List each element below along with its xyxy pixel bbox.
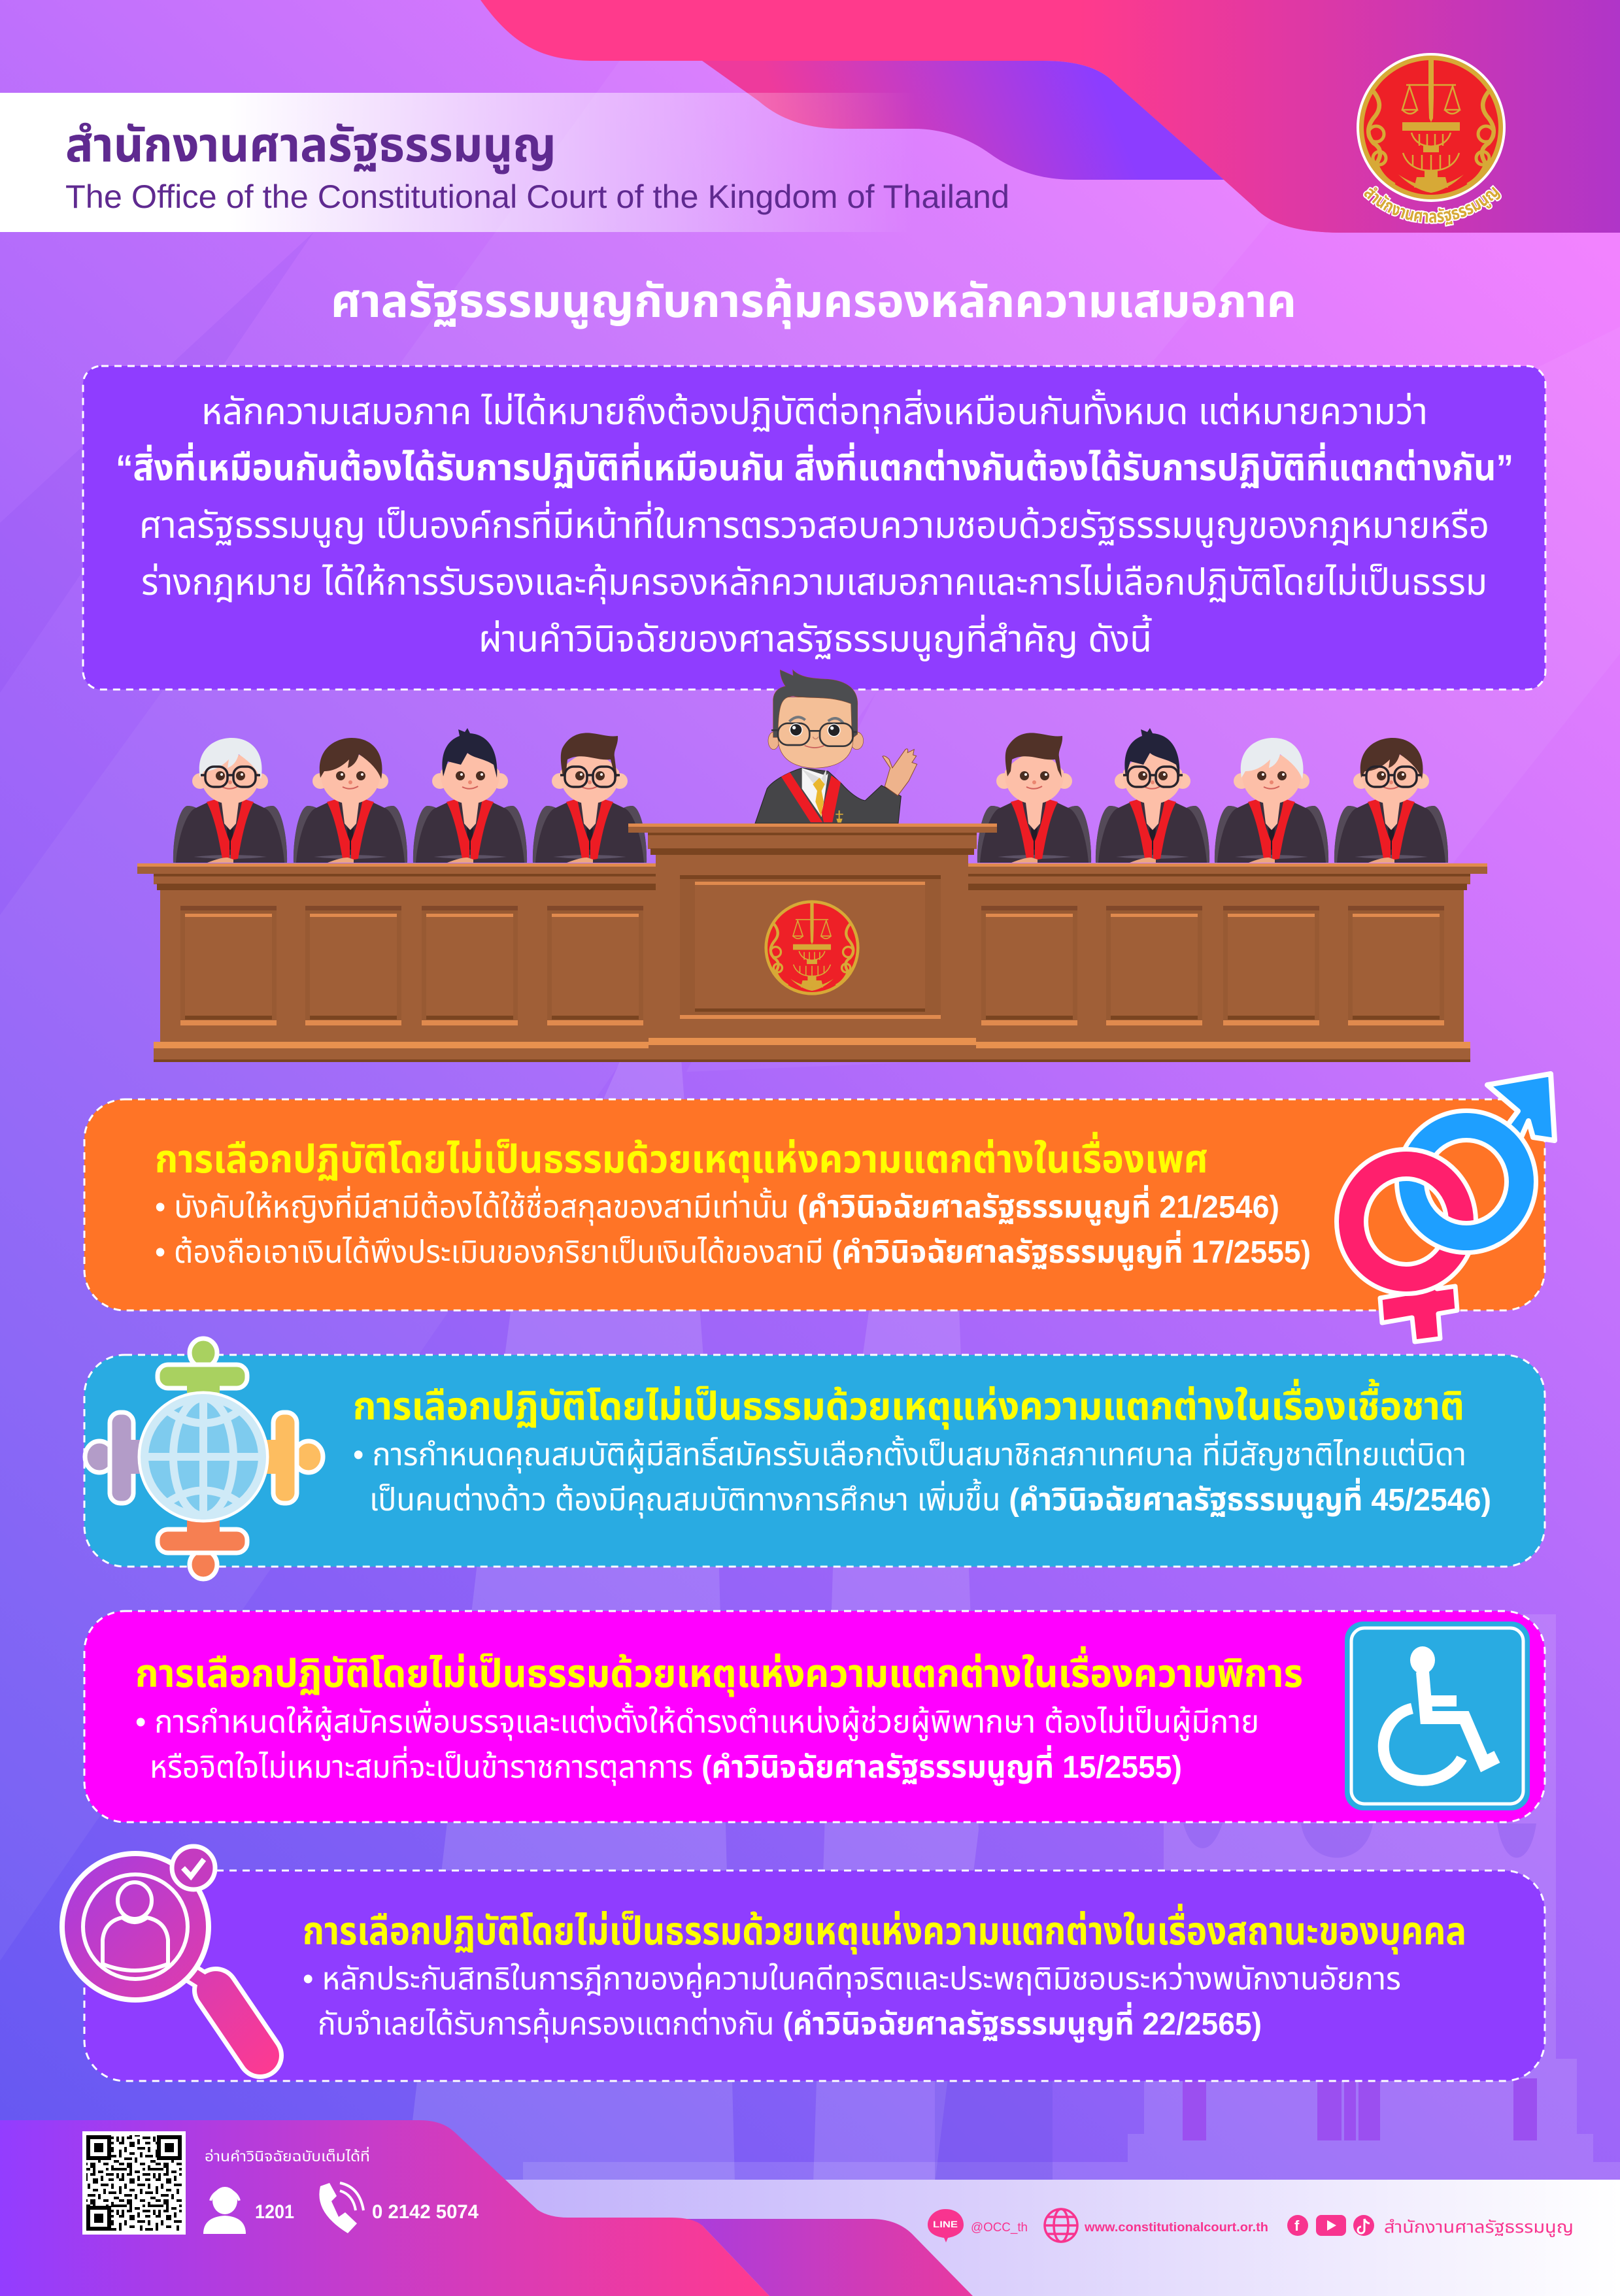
icon: gender symbols <box>1351 1074 1555 1342</box>
left and right bench <box>137 863 1487 1062</box>
website URL: www.constitutionalcourt.or.th <box>1084 2221 1268 2235</box>
bullet line 2: หรือจิตใจไม่เหมาะสมที่จะเป็นข้าราชการตุลาการ (คำวินิจฉัยศาลรัฐธรรมนูญที่ 15/2555) <box>150 1745 1182 1786</box>
read full decision label: อ่านคำวินิจฉัยฉบับเต็มได้ที่ <box>205 2146 370 2165</box>
heading: การเลือกปฏิบัติโดยไม่เป็นธรรมด้วยเหตุแห่งความแตกต่างในเรื่องความพิการ <box>135 1646 1303 1697</box>
icon: headset operator <box>203 2187 246 2234</box>
panel: race discrimination <box>84 1355 1545 1567</box>
header purple ribbon <box>702 61 1224 180</box>
panel: introduction <box>83 366 1545 690</box>
check badge <box>172 1846 215 1889</box>
main title: ศาลรัฐธรรมนูญกับการคุ้มครองหลักความเสมอภาค <box>331 276 1296 329</box>
judges seated <box>173 728 1448 863</box>
hotline 1201: 1201 <box>255 2201 294 2223</box>
bench panels <box>180 906 1444 1025</box>
orange figure <box>158 1511 247 1579</box>
judge 8 <box>1334 738 1448 863</box>
footer light band <box>0 2180 1620 2296</box>
logo: Constitutional Court seal: สำนักงานศาลรัฐธรรมนูญ <box>1362 184 1502 227</box>
bullet line 2: กับจำเลยได้รับการคุ้มครองแตกต่างกัน (คำวินิจฉัยศาลรัฐธรรมนูญที่ 22/2565) <box>318 2002 1262 2043</box>
icon: globe with people <box>85 1339 323 1579</box>
male ring overlap <box>1400 1209 1533 1255</box>
icon: wheelchair sign <box>1345 1622 1530 1810</box>
English name: The Office of the Constitutional Court of the Kingdom of Thailand <box>65 178 1009 215</box>
intro line 1: หลักความเสมอภาค ไม่ได้หมายถึงต้องปฏิบัติต่อทุกสิ่งเหมือนกันทั้งหมด แต่หมายความว่า <box>201 389 1428 433</box>
globe <box>140 1393 267 1520</box>
bullet 2: • ต้องถือเอาเงินได้พึงประเมินของภริยาเป็นเงินได้ของสามี (คำวินิจฉัยศาลรัฐธรรมนูญที่ 17/2555) <box>155 1230 1311 1271</box>
female symbol <box>1351 1164 1461 1342</box>
icon: website globe <box>1045 2209 1077 2242</box>
heading: การเลือกปฏิบัติโดยไม่เป็นธรรมด้วยเหตุแห่งความแตกต่างในเรื่องสถานะของบุคคล <box>303 1903 1466 1955</box>
judge 5 <box>977 733 1091 863</box>
icon: telephone <box>319 2183 363 2233</box>
panel: personal status discrimination <box>84 1871 1545 2081</box>
logo: Constitutional Court seal <box>1357 53 1506 227</box>
bullet line 1: • การกำหนดให้ผู้สมัครเพื่อบรรจุและแต่งตั้งให้ดำรงตำแหน่งผู้ช่วยผู้พิพากษา ต้องไม่เป็นผู้มีกาย <box>135 1701 1259 1741</box>
purple figure <box>85 1412 152 1503</box>
intro line 4: ร่างกฎหมาย ได้ให้การรับรองและคุ้มครองหลักความเสมอภาคและการไม่เลือกปฏิบัติโดยไม่เป็นธรรม <box>141 561 1487 604</box>
telephone number: 0 2142 5074 <box>372 2201 479 2223</box>
green figure <box>158 1339 247 1405</box>
judge 1 <box>173 738 287 863</box>
header pink ribbon <box>481 0 1620 233</box>
QR code <box>82 2131 186 2235</box>
icon: YouTube <box>1316 2215 1346 2236</box>
icon: Facebook <box>1287 2215 1308 2236</box>
amber figure <box>255 1412 323 1503</box>
icon: raised hand <box>883 749 917 795</box>
icon: TikTok <box>1353 2215 1374 2236</box>
intro line 3: ศาลรัฐธรรมนูญ เป็นองค์กรที่มีหน้าที่ในการตรวจสอบความชอบด้วยรัฐธรรมนูญของกฎหมายหรือ <box>139 501 1489 548</box>
footer rear ribbon <box>671 2219 973 2296</box>
header ribbon right fade <box>1079 0 1620 233</box>
social account name: สำนักงานศาลรัฐธรรมนูญ <box>1384 2217 1574 2237</box>
judge 3 <box>413 728 527 863</box>
footer <box>0 2120 1620 2296</box>
bullet 1: • บังคับให้หญิงที่มีสามีต้องได้ใช้ชื่อสกุลของสามีเท่านั้น (คำวินิจฉัยศาลรัฐธรรมนูญที่ 21/2546) <box>155 1185 1279 1226</box>
Thai name: สำนักงานศาลรัฐธรรมนูญ <box>65 118 556 175</box>
panel: sex discrimination <box>84 1099 1545 1310</box>
bullet line 1: • หลักประกันสิทธิในการฎีกาของคู่ความในคดีทุจริตและประพฤติมิชอบระหว่างพนักงานอัยการ <box>303 1962 1401 1998</box>
LINE account: @OCC_th <box>971 2221 1028 2235</box>
heading: การเลือกปฏิบัติโดยไม่เป็นธรรมด้วยเหตุแห่งความแตกต่างในเรื่องเชื้อชาติ <box>353 1378 1464 1430</box>
icon: Facebook: f <box>1294 2218 1300 2234</box>
intro line 5: ผ่านคำวินิจฉัยของศาลรัฐธรรมนูญที่สำคัญ ดังนี้ <box>479 614 1152 661</box>
judge 4 <box>533 733 647 863</box>
bullet line 2: เป็นคนต่างด้าว ต้องมีคุณสมบัติทางการศึกษา เพิ่มขึ้น (คำวินิจฉัยศาลรัฐธรรมนูญที่ 45/2546) <box>369 1478 1491 1519</box>
icon: LINE: LINE <box>933 2219 958 2229</box>
president judge <box>755 670 917 824</box>
header white band <box>0 93 915 232</box>
judge 2 <box>294 738 407 863</box>
person <box>103 1882 168 1971</box>
bullet line 1: • การกำหนดคุณสมบัติผู้มีสิทธิ์สมัครรับเลือกตั้งเป็นสมาชิกสภาเทศบาล ที่มีสัญชาติไทยแต่บิดา <box>353 1433 1466 1474</box>
central podium <box>628 824 997 1062</box>
panel: disability discrimination <box>84 1611 1545 1822</box>
footer front ribbon <box>0 2120 769 2296</box>
intro line 2: quote: “สิ่งที่เหมือนกันต้องได้รับการปฏิบัติที่เหมือนกัน สิ่งที่แตกต่างกันต้องได้รับการปฏิบัติที่แตกต่างกัน” <box>116 442 1513 488</box>
podium seal <box>764 900 860 995</box>
heading: การเลือกปฏิบัติโดยไม่เป็นธรรมด้วยเหตุแห่งความแตกต่างในเรื่องเพศ <box>155 1131 1208 1183</box>
icon: LINE <box>928 2209 964 2242</box>
judge 7 <box>1215 738 1328 863</box>
organisation name <box>65 118 1009 215</box>
judges' bench <box>137 824 1487 1062</box>
judge 6 <box>1096 728 1209 863</box>
icon: magnifying glass with person <box>62 1846 260 2055</box>
male symbol <box>1411 1074 1555 1238</box>
